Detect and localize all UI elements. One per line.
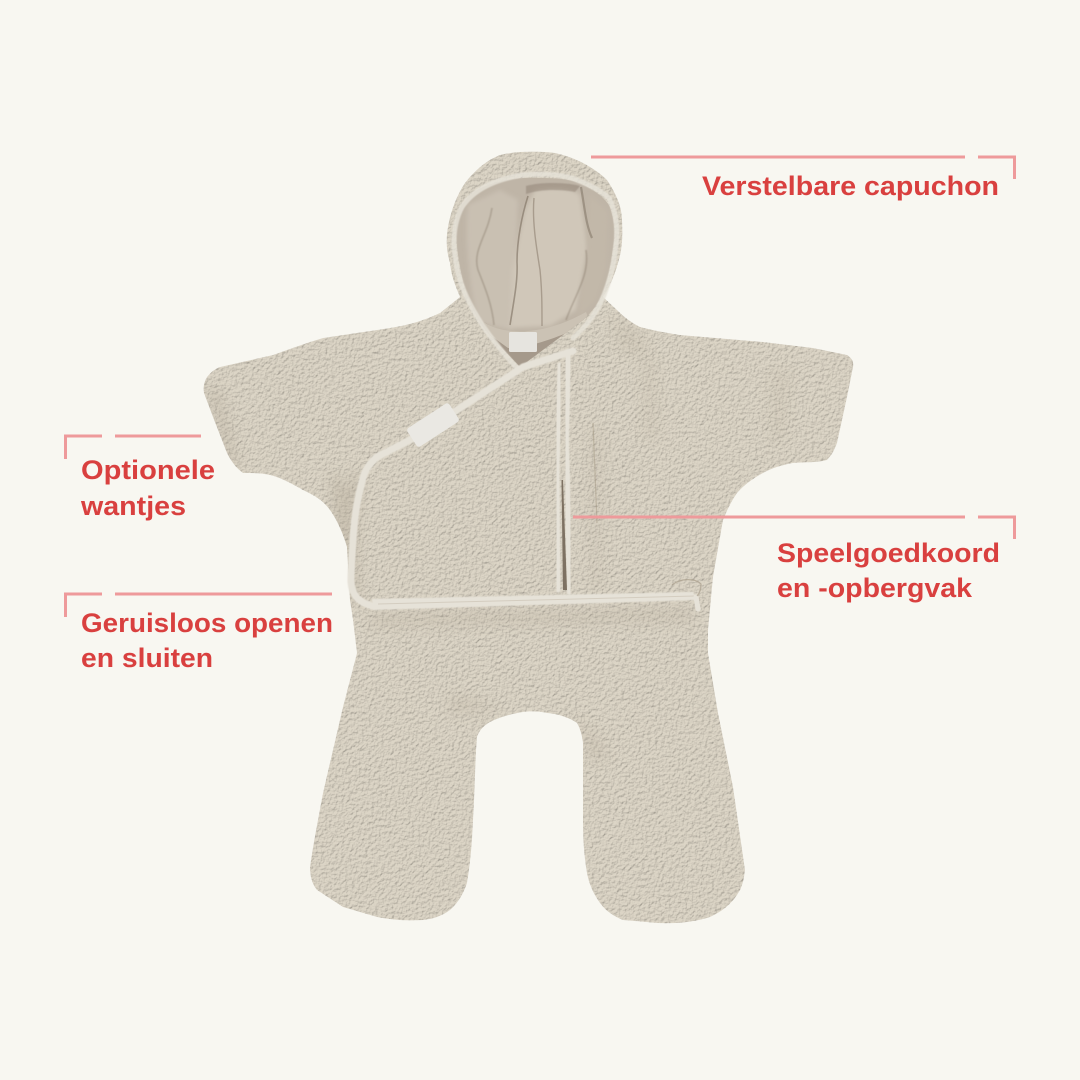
label line one: Speelgoedkoord — [777, 538, 1000, 568]
lining folds — [468, 182, 593, 366]
label: Verstelbare capuchon — [702, 171, 999, 201]
label line one: Optionele — [81, 455, 215, 485]
zip end tab — [696, 597, 698, 609]
leader line — [573, 517, 1014, 539]
callout: Speelgoedkoord en -opbergvak — [573, 517, 1014, 603]
neck label — [509, 332, 537, 352]
label line two: en sluiten — [81, 643, 213, 673]
leader line — [66, 436, 201, 459]
callout: Verstelbare capuchon — [591, 157, 1014, 201]
leader line — [66, 594, 332, 617]
body shading — [210, 332, 685, 754]
product photo: baby suit — [204, 152, 853, 923]
callout: Geruisloos openen en sluiten — [66, 594, 333, 673]
hood lining — [456, 178, 615, 368]
centre opening gap — [562, 480, 567, 590]
zipper band — [372, 592, 697, 610]
infographic canvas — [64, 152, 1016, 924]
hood edge piping — [454, 174, 617, 369]
vertical piping left — [557, 365, 560, 590]
suit silhouette with fleece texture — [204, 152, 853, 923]
front flap piping — [351, 351, 573, 606]
callout: Optionele wantjes — [66, 436, 215, 521]
vertical piping right — [566, 357, 570, 592]
pocket seam — [593, 423, 597, 523]
pocket stitch around zip end — [672, 580, 701, 596]
leader line — [591, 157, 1014, 179]
label line one: Geruisloos openen — [81, 608, 333, 638]
label line two: wantjes — [80, 491, 186, 521]
label line two: en -opbergvak — [777, 573, 973, 603]
wrap tag — [406, 402, 460, 448]
zipper tape line — [378, 596, 695, 604]
